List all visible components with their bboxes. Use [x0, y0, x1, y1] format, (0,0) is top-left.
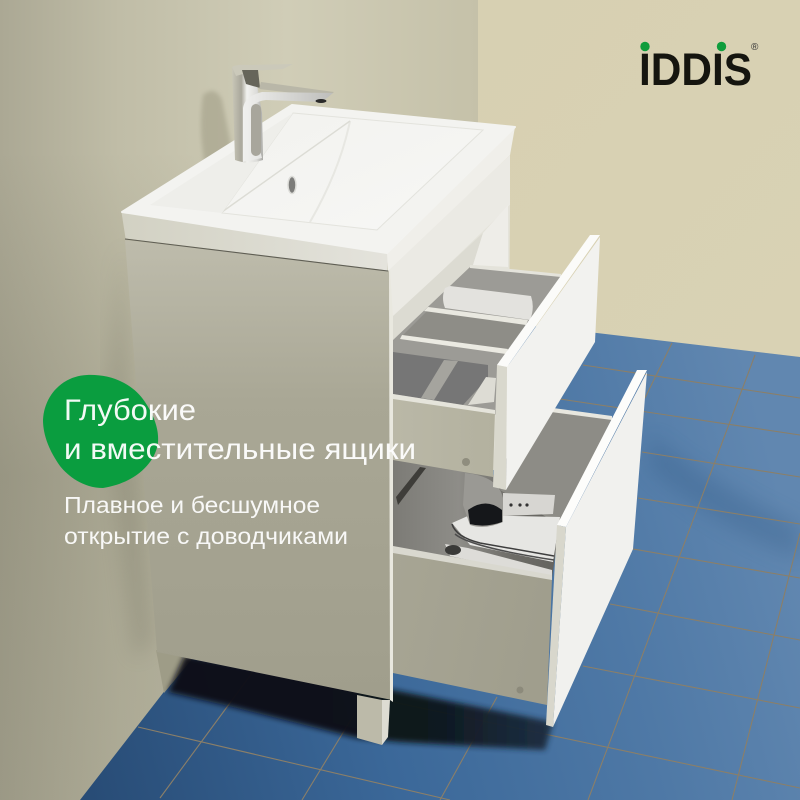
- divider one: [424, 307, 528, 325]
- drawer screw: [462, 458, 470, 466]
- shadow under vanity: [168, 655, 553, 750]
- drawer front panel: [553, 372, 647, 727]
- dark roll: [463, 473, 503, 527]
- basin bowl: [222, 113, 483, 230]
- drawer side wall: [393, 552, 552, 705]
- heading: Глубокие: [64, 394, 196, 427]
- faucet body: [232, 66, 263, 162]
- faucet shadow on wall: [201, 91, 232, 165]
- faucet: [232, 64, 334, 162]
- lower drawer: [393, 370, 647, 727]
- drain: [288, 176, 296, 194]
- stored items: [445, 473, 560, 578]
- heading: и вместительные ящики: [64, 433, 416, 466]
- section divider shade: [403, 310, 528, 350]
- appliance: [503, 493, 555, 516]
- upper drawer: [393, 265, 612, 578]
- apron rail: [390, 155, 510, 318]
- rolled towel: [443, 286, 533, 320]
- logo dots: [640, 42, 726, 51]
- faucet lever top: [232, 64, 293, 76]
- faucet lever arm: [259, 82, 334, 97]
- left wall: [0, 0, 480, 800]
- cabinet side panel: [125, 240, 392, 700]
- logo: [639, 42, 759, 95]
- papers: [452, 515, 560, 562]
- heading: [64, 394, 416, 466]
- registered mark: ®: [751, 42, 759, 53]
- steel back of bay: [393, 410, 612, 578]
- rim back: [470, 265, 561, 277]
- shadow on right tiles: [650, 435, 800, 560]
- basin right lip: [387, 127, 515, 271]
- subheading: [64, 492, 348, 549]
- left deck: [150, 113, 293, 213]
- drawer side wall: [393, 396, 495, 477]
- basin top: [122, 105, 515, 253]
- faucet neck: [242, 70, 260, 88]
- folded grey towel: [393, 352, 496, 405]
- cabinet leg: [357, 695, 390, 745]
- floor: [80, 320, 800, 800]
- drawer inner grey wall: [500, 410, 612, 525]
- divider two: [400, 335, 508, 354]
- drawer interior: [393, 267, 561, 415]
- upper drawer front panel: [493, 235, 600, 490]
- subheading: Плавное и бесшумное: [64, 492, 320, 518]
- logo wordmark: IDDIS: [639, 44, 752, 95]
- subheading: открытие с доводчиками: [64, 523, 348, 549]
- faucet spout: [243, 92, 333, 162]
- recess under plinth: [156, 650, 193, 693]
- cabinet shadow on wall: [105, 240, 152, 660]
- right wall: [478, 0, 800, 357]
- cabinet front edge: [389, 268, 393, 702]
- cosmetic tube: [445, 544, 552, 578]
- vanity cabinet: [122, 64, 515, 745]
- aerator: [316, 99, 326, 103]
- drawer screw: [516, 686, 524, 694]
- faucet slot: [251, 104, 261, 156]
- rail: [396, 467, 426, 505]
- green blob: [43, 375, 158, 488]
- drawer bay back panel: [393, 205, 510, 470]
- basin: [122, 105, 515, 271]
- basin front lip: [122, 212, 387, 270]
